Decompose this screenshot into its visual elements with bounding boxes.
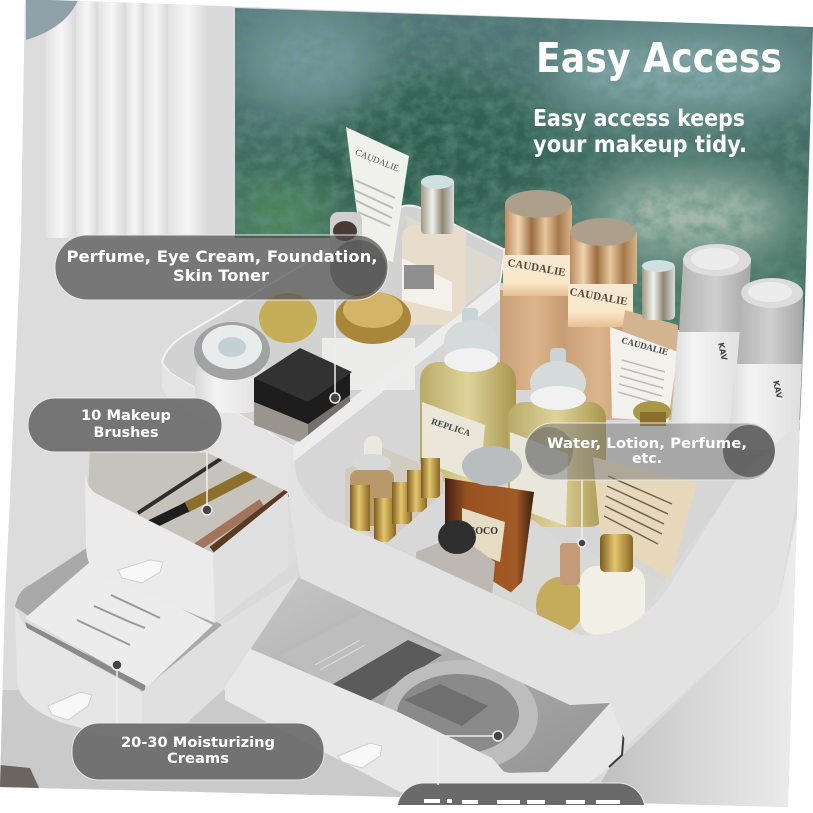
icon: drawer handle <box>48 692 92 720</box>
forest window <box>235 0 813 430</box>
icon: drawer handle <box>338 743 382 768</box>
product: Caudalie tube <box>346 127 409 262</box>
product: Caudalie card: CAUDALIE <box>620 335 669 357</box>
icon: drawer handle <box>118 560 163 583</box>
callout: 10 makeup brushes: Brushes <box>94 425 158 441</box>
callout: perfume, eye cream, foundation, skin toner <box>55 235 388 403</box>
subtitle <box>533 106 747 158</box>
callout: water, lotion, perfume, etc: Water, Lotion, Perfume, <box>547 436 747 452</box>
panel: organizer top left compartment <box>162 206 505 447</box>
product: box behind card <box>610 310 678 420</box>
product: Coco perfume <box>445 446 534 598</box>
panel: upper left drawer <box>85 450 288 623</box>
makeup brushes <box>138 458 288 550</box>
panel: lower left drawer <box>15 547 300 745</box>
product: black lid jar <box>254 348 352 445</box>
product: Replica perfume <box>420 308 516 482</box>
product: yellow globe bottle <box>259 293 317 343</box>
subtitle: Easy access keeps <box>533 106 745 132</box>
product: Caudalie peach bottle two: CAUDALIE <box>569 286 628 308</box>
product: small white bottle <box>580 534 645 635</box>
product: Replica perfume: REPLICA <box>430 416 472 438</box>
product: silver lid jar <box>194 322 270 413</box>
callout: 10 makeup brushes: 10 Makeup <box>81 408 171 424</box>
product: cream box <box>593 401 697 580</box>
panel: right small compartment <box>505 543 667 635</box>
product: black stopper bottle <box>416 520 495 598</box>
product: Coco perfume: COCO <box>468 526 498 537</box>
panel: tray front wall <box>288 420 800 745</box>
product: white bottle two <box>728 278 803 450</box>
product: small gold bottles <box>350 458 440 542</box>
panel: small front compartment <box>345 448 443 543</box>
callout: 20-30 moisturizing creams <box>72 660 324 780</box>
product: white bottle two: KAV <box>771 380 784 400</box>
front table ledge <box>0 690 420 800</box>
callout: perfume, eye cream, foundation, skin toner: Skin Toner <box>173 266 269 285</box>
panel: coco compartment <box>387 493 563 598</box>
product: Caudalie card <box>610 327 678 422</box>
subtitle: your makeup tidy. <box>533 132 747 158</box>
product: gold lid cream jar <box>322 292 415 390</box>
callout: 20-30 moisturizing creams: 20-30 Moisturizing <box>121 735 275 751</box>
tray side wall <box>166 370 293 496</box>
product: Caudalie peach bottle one <box>500 190 572 390</box>
callout: 20-30 moisturizing creams: Creams <box>167 751 229 767</box>
callout: cut-off bottom pill <box>397 731 645 813</box>
callout: perfume, eye cream, foundation, skin toner: Perfume, Eye Cream, Foundation, <box>66 247 378 266</box>
panel: lower right drawer <box>225 575 640 800</box>
product: second perfume <box>508 348 606 527</box>
product: silver cap bottle <box>642 260 675 320</box>
product: clear perfume <box>402 175 466 325</box>
product: cotton pad pack <box>25 562 213 692</box>
product: Caudalie peach bottle two <box>565 218 637 420</box>
curtain <box>22 0 235 240</box>
icon: curtain tie-back <box>26 0 78 40</box>
product: white bottle one: KAV <box>716 342 729 362</box>
panel: organizer right compartment interior <box>345 282 800 430</box>
product: Caudalie tube: CAUDALIE <box>354 147 401 174</box>
comb <box>315 640 442 706</box>
product: small yellow bottle <box>536 543 584 633</box>
product: white bottle one <box>670 244 751 440</box>
callout: water, lotion, perfume, etc <box>525 423 775 547</box>
mirror <box>382 660 538 772</box>
table dark corner <box>0 765 39 788</box>
title: Easy Access <box>536 34 782 82</box>
callout: 10 makeup brushes <box>28 398 222 515</box>
product: Caudalie peach bottle one: CAUDALIE <box>507 257 566 279</box>
table behind organizer <box>4 238 330 646</box>
callout: water, lotion, perfume, etc: etc. <box>632 451 662 467</box>
divider wall between compartments <box>293 282 500 462</box>
floor shadow at right <box>601 518 796 807</box>
product: dropper bottle <box>350 436 394 526</box>
product: perfume stopper <box>330 212 362 250</box>
